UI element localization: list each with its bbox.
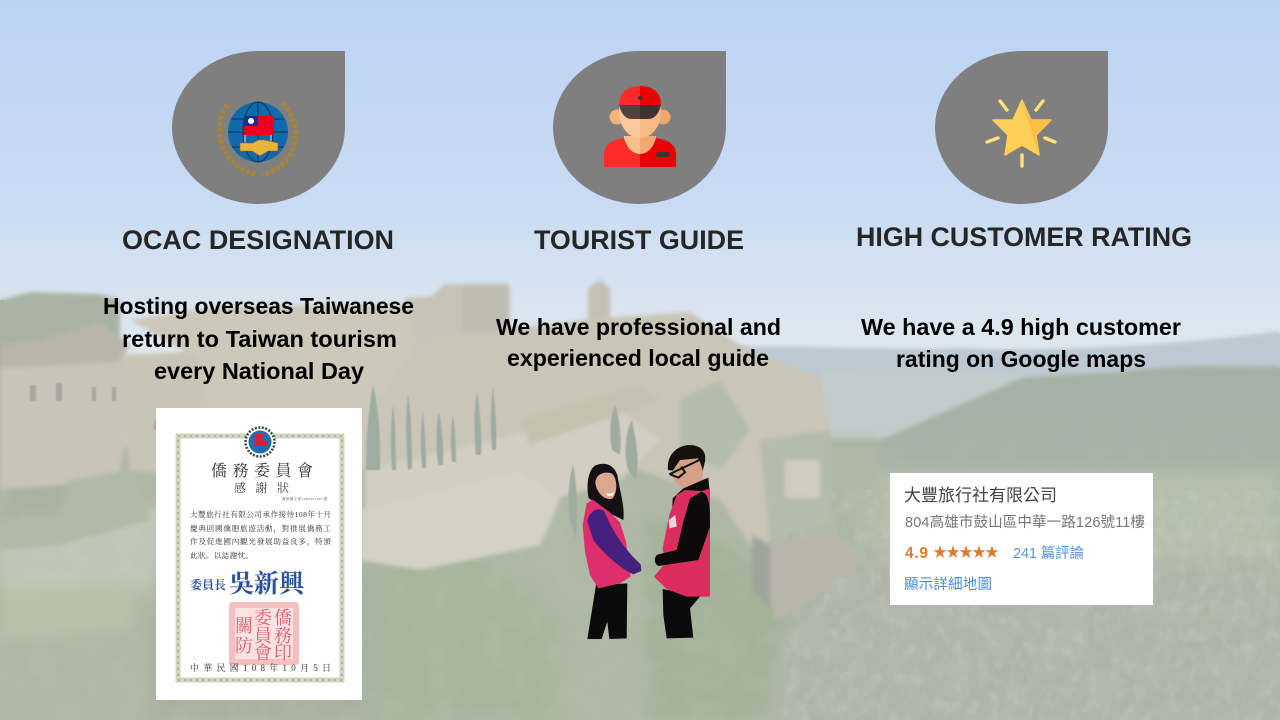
heading: OCAC designation: OCAC DESIGNATION: [122, 225, 394, 255]
text block: hosting overseas Taiwanese: every National Day: [154, 358, 364, 384]
certificate of thanks: 慶典回國僑胞旅遊活動，對推展僑務工: [190, 523, 331, 534]
certificate of thanks: 感謝狀: [234, 480, 289, 495]
certificate of thanks: 僑務委員會: [211, 462, 313, 480]
Google Maps rating card: 4.9: [905, 545, 928, 562]
certificate of thanks: 大豐旅行社有限公司承作接待108年十月: [190, 509, 331, 519]
certificate of thanks: 員: [254, 626, 272, 646]
text block: 4.9 rating on Google maps: rating on Google maps: [896, 346, 1146, 372]
certificate of thanks: [156, 408, 362, 700]
Google Maps rating card: [890, 473, 1153, 605]
Google Maps rating card: ★★★★★: [933, 544, 999, 560]
certificate of thanks: 僑務橋字第1080302907號: [282, 496, 328, 501]
certificate of thanks: 委員長: [190, 577, 226, 592]
woman: [583, 464, 641, 639]
text block: professional local guide: [496, 314, 781, 371]
heading: tourist guide: TOURIST GUIDE: [534, 225, 744, 255]
certificate of thanks: 務: [274, 626, 292, 646]
text block: hosting overseas Taiwanese: return to Taiwan tourism: [122, 326, 397, 352]
man: [654, 445, 710, 638]
cypress trees: [366, 385, 638, 540]
icon: shining star in grey teardrop: [935, 51, 1108, 204]
text block: professional local guide: experienced local guide: [507, 345, 769, 371]
icon: OCAC emblem in grey teardrop: [172, 51, 345, 204]
panel: tourist guide: [496, 51, 781, 639]
certificate of thanks: 吳新興: [229, 570, 308, 598]
panel: high customer rating: [856, 51, 1192, 605]
certificate of thanks: 作及促進國內觀光發展助益良多，特頒: [190, 536, 331, 547]
certificate of thanks: 印: [274, 643, 292, 663]
certificate of thanks: 關: [235, 616, 253, 636]
Google Maps rating card: 241 篇評論: [1013, 544, 1084, 562]
building windows: [30, 383, 158, 430]
text block: hosting overseas Taiwanese: Hosting overseas Taiwanese: [103, 293, 414, 319]
certificate of thanks: 防: [235, 636, 253, 656]
photo: two guides in pink vests: [583, 445, 710, 639]
certificate of thanks: 僑: [274, 608, 292, 628]
icon: guide with red cap in grey teardrop: [553, 51, 726, 204]
Google Maps rating card: 804高雄市鼓山區中華一路126號11樓: [905, 514, 1145, 531]
certificate of thanks: 中 華 民 國 1 0 8 年 1 0 月 5 日: [190, 662, 331, 673]
panel: OCAC designation: [103, 51, 414, 700]
Google Maps rating card: 顯示詳細地圖: [904, 576, 992, 593]
text block: 4.9 rating on Google maps: [861, 314, 1181, 372]
heading: high customer rating: HIGH CUSTOMER RATING: [856, 222, 1192, 252]
Google Maps rating card: 大豐旅行社有限公司: [904, 486, 1057, 505]
certificate of thanks: 此狀。以誌謝忱。: [190, 550, 253, 560]
text block: 4.9 rating on Google maps: We have a 4.9 high customer: [861, 314, 1181, 340]
certificate of thanks: 會: [254, 643, 272, 663]
text block: hosting overseas Taiwanese: [103, 293, 414, 384]
foliage texture: [0, 420, 1280, 720]
text block: professional local guide: We have professional and: [496, 314, 781, 340]
certificate of thanks: 委: [254, 608, 272, 628]
